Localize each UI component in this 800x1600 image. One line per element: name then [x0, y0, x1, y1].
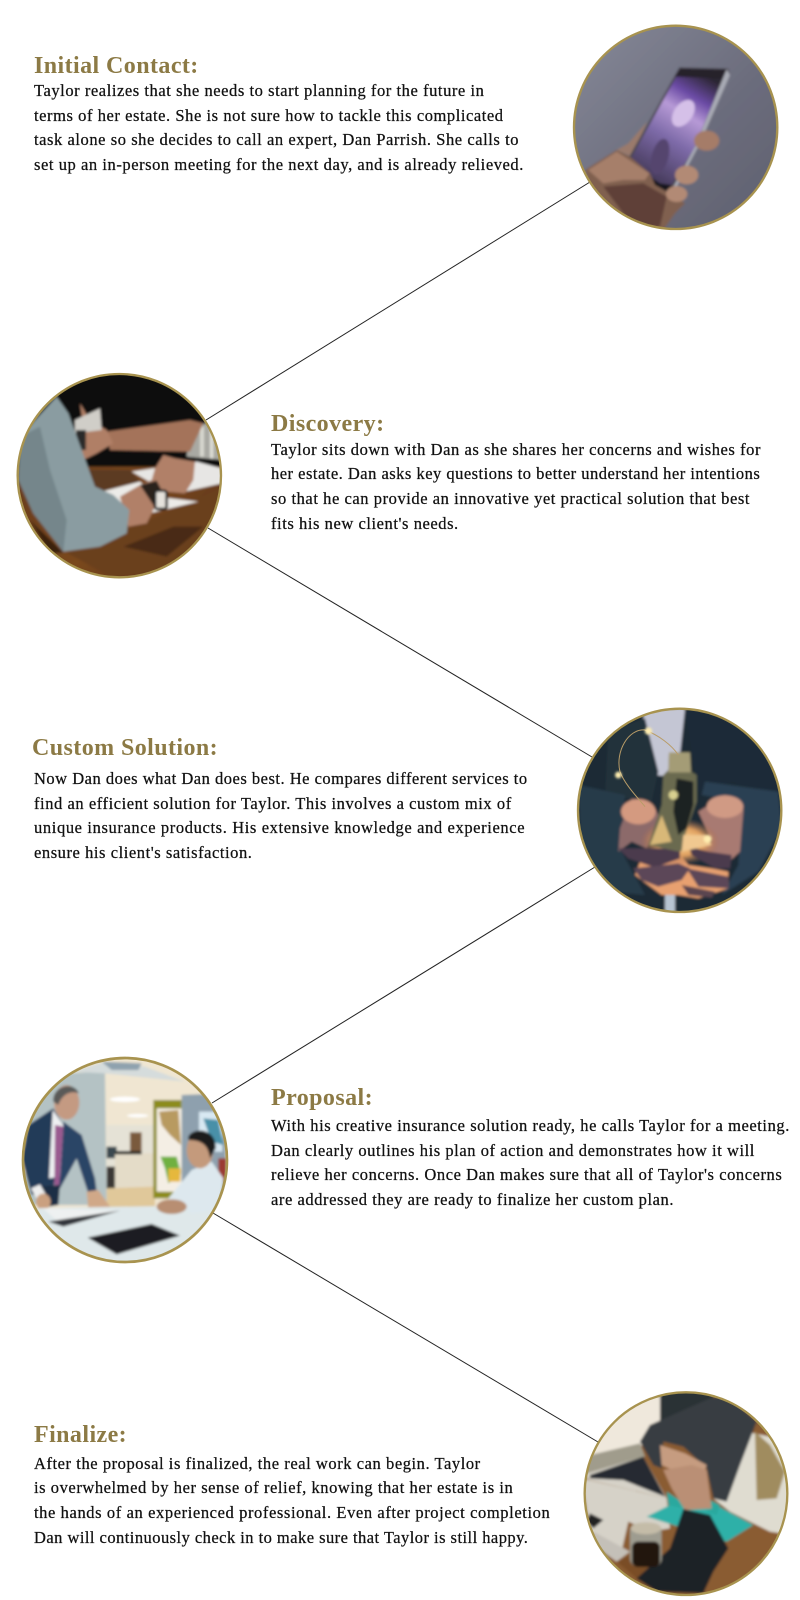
body text [34, 81, 524, 174]
heading: Custom Solution: [32, 735, 218, 761]
photo: two men in office meeting [18, 1055, 232, 1268]
step: custom solution [32, 735, 528, 862]
heading: Initial Contact: [34, 53, 199, 79]
body text: Dan clearly outlines his plan of action and demonstrates how it will [271, 1141, 755, 1160]
body text: set up an in-person meeting for the next day, and is already relieved. [34, 155, 524, 174]
connector line: solution to proposal [212, 867, 595, 1103]
body text: find an efficient solution for Taylor. This involves a custom mix of [34, 794, 512, 813]
body text [34, 1454, 550, 1547]
body text: With his creative insurance solution ready, he calls Taylor for a meeting. [271, 1116, 790, 1135]
heading: Finalize: [34, 1422, 127, 1448]
step: finalize [34, 1422, 550, 1547]
body text: the hands of an experienced professional. Even after project completion [34, 1503, 550, 1522]
body text: so that he can provide an innovative yet practical solution that best [271, 489, 750, 508]
step: discovery [271, 411, 761, 533]
body text: Taylor realizes that she needs to start planning for the future in [34, 81, 484, 100]
photo: handshake over coffee table [580, 1388, 793, 1600]
body text: relieve her concerns. Once Dan makes sure that all of Taylor's concerns [271, 1165, 782, 1184]
heading: Discovery: [271, 411, 384, 437]
body text: fits his new client's needs. [271, 514, 459, 533]
body text: Taylor sits down with Dan as she shares her concerns and wishes for [271, 440, 761, 458]
photo: hands holding glowing light bulb [575, 705, 785, 918]
connector line: contact to discovery [206, 182, 590, 420]
body text: terms of her estate. She is not sure how to tackle this complicated [34, 106, 504, 125]
body text: ensure his client's satisfaction. [34, 843, 252, 862]
body text [34, 769, 528, 862]
body text [270, 1116, 790, 1209]
body text: Now Dan does what Dan does best. He compares different services to [34, 769, 528, 788]
body text: task alone so she decides to call an expert, Dan Parrish. She calls to [34, 130, 519, 149]
step: proposal [270, 1085, 790, 1209]
photo: meeting at wooden table [13, 370, 227, 583]
photo: hand holding phone [570, 20, 783, 233]
body text: unique insurance products. His extensive knowledge and experience [34, 818, 525, 837]
body text: are addressed they are ready to finalize her custom plan. [271, 1190, 674, 1209]
connector line: proposal to finalize [213, 1213, 598, 1442]
body text [271, 440, 761, 533]
body text: her estate. Dan asks key questions to better understand her intentions [271, 464, 760, 483]
step: initial contact [34, 53, 524, 174]
body text: After the proposal is finalized, the real work can begin. Taylor [34, 1454, 481, 1472]
connector line: discovery to solution [208, 528, 592, 757]
body text: is overwhelmed by her sense of relief, knowing that her estate is in [34, 1478, 513, 1497]
heading: Proposal: [271, 1085, 373, 1111]
body text: Dan will continuously check in to make sure that Taylor is still happy. [34, 1528, 528, 1547]
